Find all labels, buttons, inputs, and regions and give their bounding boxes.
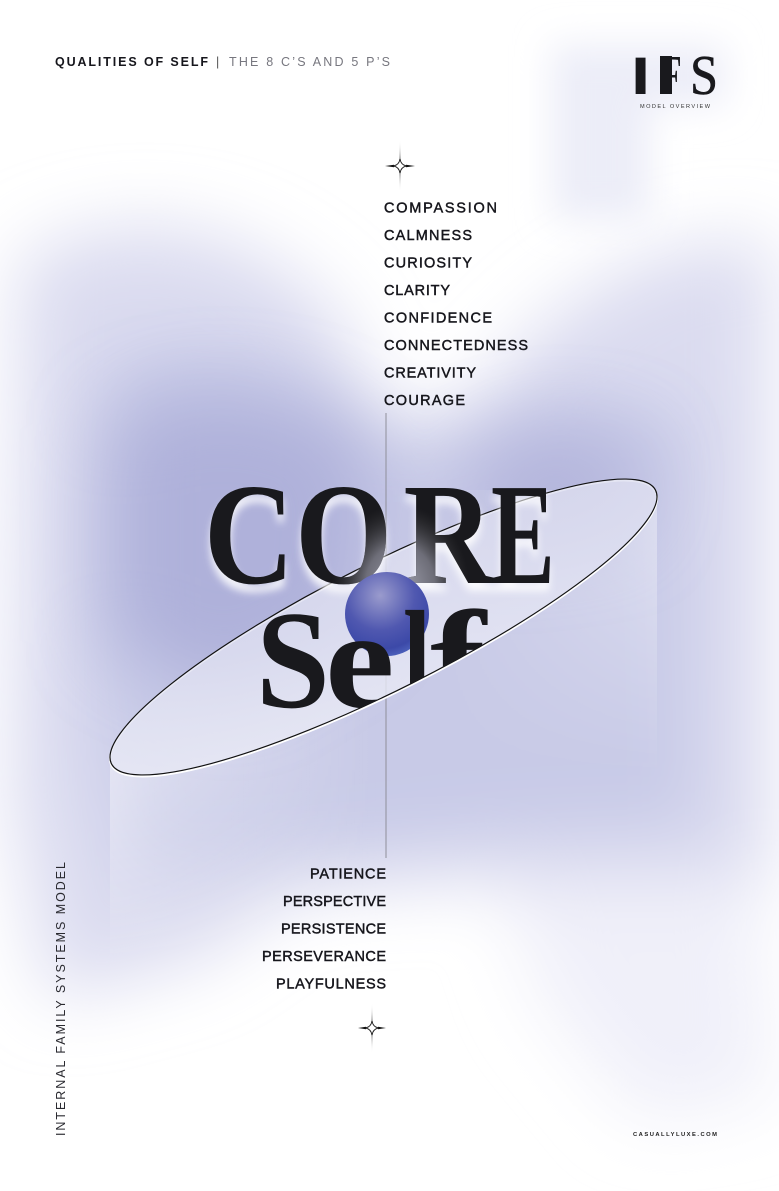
icon: bottom star [358,1003,386,1053]
logo: IFS: MODEL OVERVIEW [640,104,711,110]
heading: Self [263,608,488,708]
logo: IFS: S [690,45,718,107]
list: 8 C's: CREATIVITY [384,366,476,382]
icon: top star [385,140,415,192]
list: 8 C's: CLARITY [384,283,450,299]
heading: Self: l [403,583,431,738]
heading: CORE: COR [204,454,495,615]
heading: Self: e [325,584,395,738]
list: 5 P's: PERSPECTIVE [283,894,386,910]
logo: IFS [631,45,718,110]
heading: CORE: E [491,454,555,615]
list: 8 C's: CALMNESS [384,228,472,244]
logo: IFS: I [631,47,650,106]
side label: INTERNAL FAMILY SYSTEMS MODEL [54,862,68,1136]
list: 5 P's: PATIENCE [310,866,386,882]
ellipse extrusion: right light curtain [546,490,657,664]
list: 8 C's: CONFIDENCE [384,310,492,326]
orbit ellipse glow [83,435,684,822]
heading glow: COR [204,462,495,623]
ellipse extrusion: left light curtain [110,747,273,864]
sphere [345,572,429,656]
list: 8 C's: COMPASSION [384,200,497,216]
list: 5 P's [262,866,386,992]
heading: CORE: COR [204,454,495,615]
header: qualities of self: | [216,55,219,69]
heading: Self: f [430,583,488,738]
list: 5 P's: PERSISTENCE [281,922,386,938]
list: 8 C's [384,200,528,409]
footer url: CASUALLYLUXE.COM [633,1132,717,1138]
heading glow: E [491,462,555,623]
list: 5 P's: PERSEVERANCE [262,949,386,965]
list: 8 C's: CONNECTEDNESS [384,338,528,354]
logo: IFS: F [659,45,681,107]
list: 8 C's: COURAGE [384,393,465,409]
header: qualities of self [55,55,390,69]
list: 5 P's: PLAYFULNESS [276,976,386,992]
orbit ellipse [83,434,684,820]
vertical axis line [385,413,387,858]
header: qualities of self: QUALITIES OF SELF [55,55,208,69]
list: 8 C's: CURIOSITY [384,256,472,272]
heading: Self: S [256,582,330,738]
header: qualities of self: THE 8 C’S AND 5 P’S [229,55,390,69]
